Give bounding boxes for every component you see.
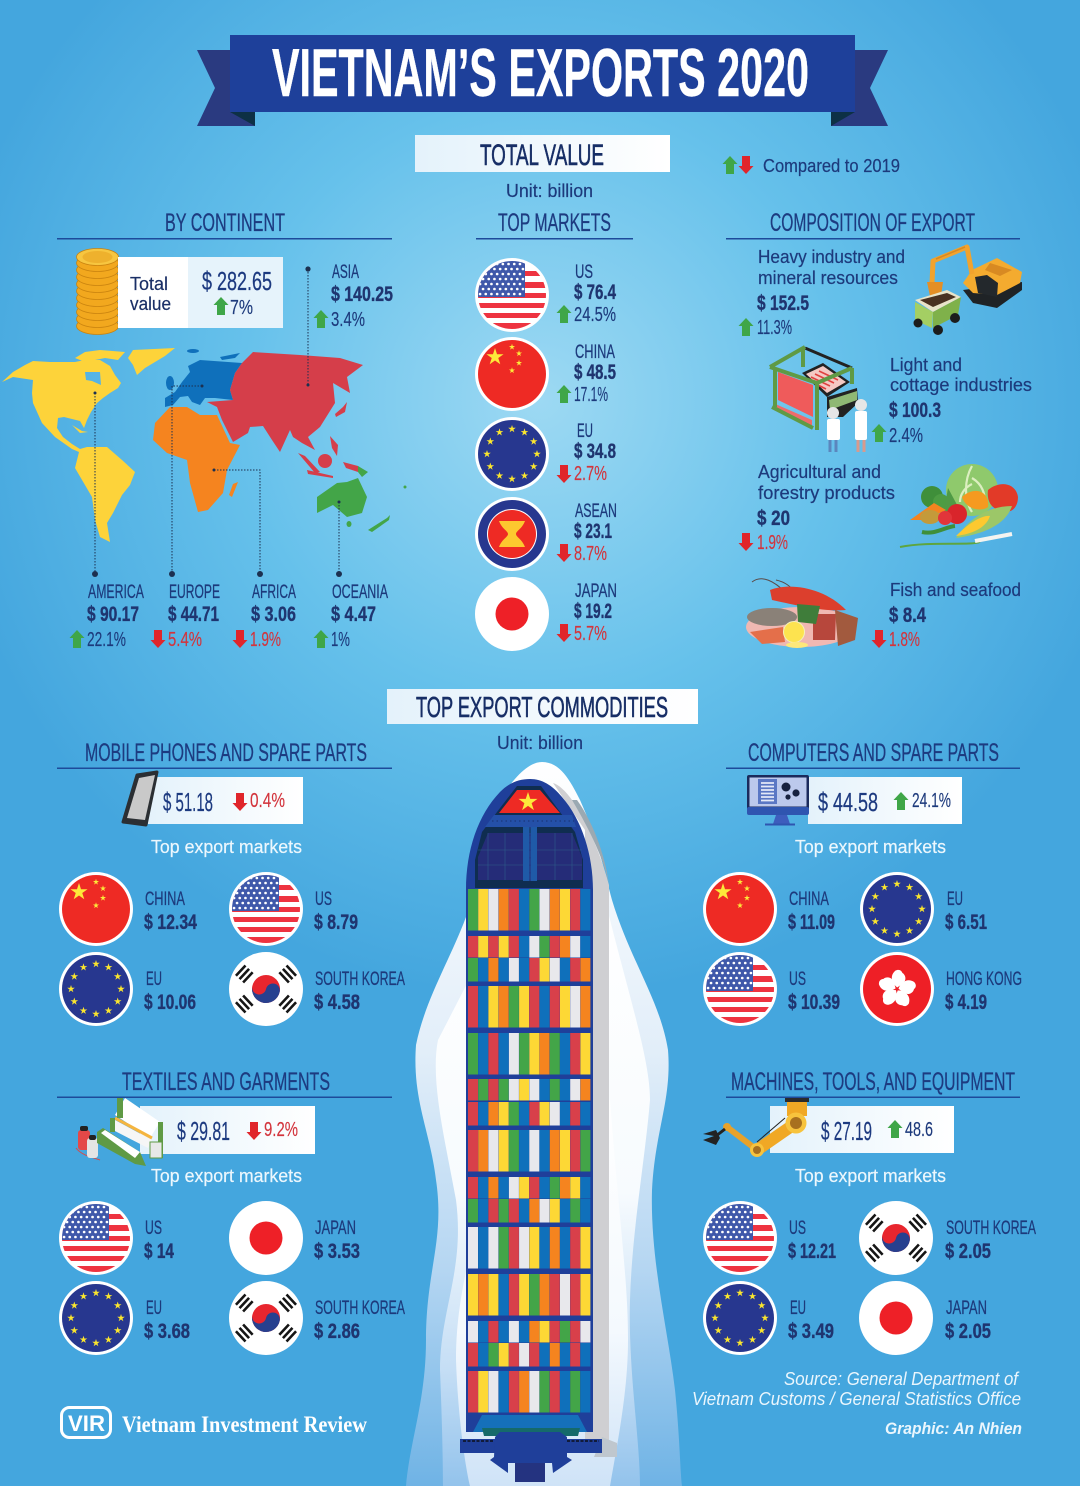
market: japan: JAPAN <box>575 581 617 602</box>
market: eu: $ 34.8 <box>574 440 616 463</box>
publisher logo: Vietnam Investment Review <box>122 1412 367 1437</box>
market: eu: $ 10.06 <box>144 991 196 1014</box>
market: south korea: SOUTH KOREA <box>315 1298 405 1319</box>
icon: coin stack <box>76 248 118 334</box>
market: hong kong <box>860 952 1022 1026</box>
market: us: US <box>575 262 593 283</box>
market: eu: $ 3.49 <box>788 1320 834 1343</box>
market: japan: JAPAN <box>315 1218 356 1239</box>
top export markets label: Top export markets <box>795 1166 946 1186</box>
source credit: Graphic: An Nhien <box>885 1419 1022 1438</box>
market: eu: EU <box>790 1298 806 1319</box>
label: asia <box>314 262 393 331</box>
market: eu <box>59 1281 190 1355</box>
market: us <box>59 1201 174 1275</box>
seafood text: 1.8% <box>889 629 920 651</box>
market: china: 17.1% <box>574 384 608 406</box>
value box: $ 27.19 <box>821 1116 872 1146</box>
heading: textiles: TEXTILES AND GARMENTS <box>122 1068 330 1096</box>
wake <box>406 762 682 1486</box>
market: japan: 5.7% <box>574 623 607 645</box>
heading: top markets: TOP MARKETS <box>498 209 611 237</box>
market: japan <box>859 1281 991 1355</box>
market: asean: ASEAN <box>575 501 617 522</box>
panel: mobile phones <box>57 739 405 1026</box>
top export markets label: Top export markets <box>795 837 946 857</box>
market: hong kong: $ 4.19 <box>945 991 987 1014</box>
total value box <box>118 257 283 328</box>
containers <box>468 889 590 1412</box>
heavy industry text <box>738 247 905 339</box>
panel: computers <box>703 739 1022 1026</box>
total value box: value <box>130 294 171 314</box>
icon: computer monitor <box>747 775 809 826</box>
panel: by continent <box>2 209 406 651</box>
market: japan: $ 19.2 <box>574 600 612 623</box>
panel: top markets <box>475 209 633 651</box>
label: oceania <box>314 582 388 651</box>
title banner <box>197 35 888 126</box>
market: eu <box>860 872 987 946</box>
panel: composition of export <box>726 209 1032 651</box>
value box: $ 44.58 <box>818 787 878 817</box>
ship bridge <box>475 786 583 888</box>
label: asia: ASIA <box>332 262 359 283</box>
market: eu: EU <box>947 889 963 910</box>
label: america: 22.1% <box>87 629 126 651</box>
market: japan <box>229 1201 360 1275</box>
market: us: US <box>789 1218 806 1239</box>
market: us: $ 14 <box>144 1240 174 1263</box>
map: america <box>2 348 175 542</box>
market: china: $ 48.5 <box>574 361 616 384</box>
market: us: $ 12.21 <box>788 1240 836 1263</box>
heavy industry text: $ 152.5 <box>757 292 809 315</box>
icon: textile rollers and thread <box>76 1098 162 1166</box>
market: china <box>475 337 616 411</box>
label: asia: $ 140.25 <box>331 283 393 306</box>
panel: textiles <box>57 1068 405 1355</box>
map connector lines <box>95 269 339 574</box>
market: china: $ 11.09 <box>788 911 835 934</box>
label: europe <box>150 582 220 651</box>
market: eu: EU <box>146 1298 162 1319</box>
seafood text: Fish and seafood <box>890 580 1021 600</box>
label: africa <box>232 582 296 651</box>
label: europe: EUROPE <box>169 582 220 603</box>
icon: excavator and truck <box>914 247 1022 335</box>
icon: smartphone <box>123 772 157 825</box>
market: us <box>703 1201 836 1275</box>
heavy industry text: 11.3% <box>757 317 792 339</box>
label: europe: $ 44.71 <box>168 603 219 626</box>
market: south korea <box>859 1201 1036 1275</box>
light industry text: Light and <box>890 355 962 375</box>
market: japan: $ 3.53 <box>314 1240 360 1263</box>
ship hull <box>466 779 593 1432</box>
legend: compared to 2019: Compared to 2019 <box>763 156 900 176</box>
market: us <box>229 872 358 946</box>
value box <box>148 777 303 824</box>
market: eu: $ 6.51 <box>945 911 987 934</box>
total value box: Total <box>130 274 168 294</box>
market: south korea: $ 2.86 <box>314 1320 360 1343</box>
agriculture text: forestry products <box>758 483 895 503</box>
market: eu <box>59 952 196 1026</box>
unit note: Unit: billion <box>497 733 583 753</box>
market: eu: EU <box>577 421 593 442</box>
seafood text: $ 8.4 <box>889 604 926 627</box>
heading box: top export commodities <box>387 689 698 724</box>
value box: $ 51.18 <box>163 787 213 817</box>
icon: textile machine with workers <box>770 347 867 452</box>
label: europe: 5.4% <box>168 629 202 651</box>
market: asean <box>475 497 617 571</box>
total value box: 7% <box>230 297 253 319</box>
label: africa: $ 3.06 <box>251 603 296 626</box>
map: africa <box>153 407 240 512</box>
market: china: CHINA <box>575 342 615 363</box>
market: japan: $ 2.05 <box>945 1320 991 1343</box>
market: hong kong: HONG KONG <box>946 969 1022 990</box>
icon: vegetables <box>900 464 1018 547</box>
light industry text <box>872 355 1032 447</box>
market: us: US <box>315 889 332 910</box>
publisher logo: VIR <box>68 1411 105 1436</box>
heavy industry text: Heavy industry and <box>758 247 905 267</box>
ship shadow <box>553 783 617 1457</box>
label: oceania: 1% <box>331 629 350 651</box>
value box: 0.4% <box>250 790 285 812</box>
map: oceania <box>317 466 406 532</box>
light industry text: 2.4% <box>889 425 923 447</box>
market: japan: JAPAN <box>946 1298 987 1319</box>
market: eu: $ 3.68 <box>144 1320 190 1343</box>
value box: 24.1% <box>912 790 951 812</box>
label: africa: 1.9% <box>250 629 281 651</box>
market: china: $ 12.34 <box>144 911 197 934</box>
total value box: $ 282.65 <box>202 266 272 296</box>
illustration: ship with wake <box>406 762 682 1486</box>
heading box: top export commodities: TOP EXPORT COMMODITIES <box>416 692 668 724</box>
source credit: Vietnam Customs / General Statistics Office <box>692 1389 1021 1409</box>
map: europe <box>165 349 242 407</box>
market: china: CHINA <box>789 889 829 910</box>
value box: 9.2% <box>264 1119 298 1141</box>
market: eu: EU <box>146 969 162 990</box>
agriculture text <box>738 462 895 554</box>
label: america <box>70 582 144 651</box>
label: america: AMERICA <box>88 582 144 603</box>
panel: machines <box>703 1068 1036 1355</box>
market: south korea <box>229 952 405 1026</box>
agriculture text: 1.9% <box>757 532 788 554</box>
light industry text: cottage industries <box>890 375 1032 395</box>
market: us: 24.5% <box>574 304 616 326</box>
label: oceania: $ 4.47 <box>331 603 376 626</box>
seafood text <box>872 580 1021 651</box>
market: south korea: $ 4.58 <box>314 991 360 1014</box>
ship stern <box>460 1415 602 1482</box>
value box <box>770 1106 954 1153</box>
unit note: Unit: billion <box>506 181 593 201</box>
market: japan <box>475 577 617 651</box>
heading: by continent: BY CONTINENT <box>165 209 285 237</box>
agriculture text: Agricultural and <box>758 462 881 482</box>
heading box: total value <box>415 135 670 172</box>
top export markets label: Top export markets <box>151 837 302 857</box>
market: us: $ 8.79 <box>314 911 358 934</box>
market: us: $ 10.39 <box>788 991 840 1014</box>
label: oceania: OCEANIA <box>332 582 388 603</box>
label: asia: 3.4% <box>331 309 365 331</box>
market: us <box>475 258 616 332</box>
market: south korea: $ 2.05 <box>945 1240 991 1263</box>
market: us: US <box>789 969 806 990</box>
world map <box>2 266 406 577</box>
market: eu <box>475 417 616 491</box>
value box: 48.6 <box>905 1119 933 1141</box>
light industry text: $ 100.3 <box>889 399 941 422</box>
market: eu <box>703 1281 834 1355</box>
market: asean: 8.7% <box>574 543 607 565</box>
market: us: $ 76.4 <box>574 281 616 304</box>
market: eu: 2.7% <box>574 463 607 485</box>
icon: seafood plate <box>746 579 858 648</box>
market: south korea <box>229 1281 405 1355</box>
icon: robot arm <box>703 1098 809 1157</box>
market: china <box>703 872 835 946</box>
heading: mobile phones: MOBILE PHONES AND SPARE PARTS <box>85 739 367 767</box>
source credit: Source: General Department of <box>784 1369 1020 1389</box>
heading box: total value: TOTAL VALUE <box>480 139 604 172</box>
label: africa: AFRICA <box>252 582 296 603</box>
agriculture text: $ 20 <box>757 507 790 530</box>
value box: $ 29.81 <box>177 1116 230 1146</box>
market: us <box>703 952 840 1026</box>
publisher logo <box>62 1408 367 1438</box>
market: china <box>59 872 197 946</box>
value box <box>808 777 962 824</box>
value box <box>140 1106 315 1154</box>
heavy industry text: mineral resources <box>758 268 898 288</box>
map: asia <box>207 352 363 478</box>
source credit <box>692 1369 1022 1438</box>
label: america: $ 90.17 <box>87 603 139 626</box>
top export markets label: Top export markets <box>151 1166 302 1186</box>
market: us: US <box>145 1218 162 1239</box>
market: south korea: SOUTH KOREA <box>315 969 405 990</box>
market: asean: $ 23.1 <box>574 520 612 543</box>
market: china: CHINA <box>145 889 185 910</box>
